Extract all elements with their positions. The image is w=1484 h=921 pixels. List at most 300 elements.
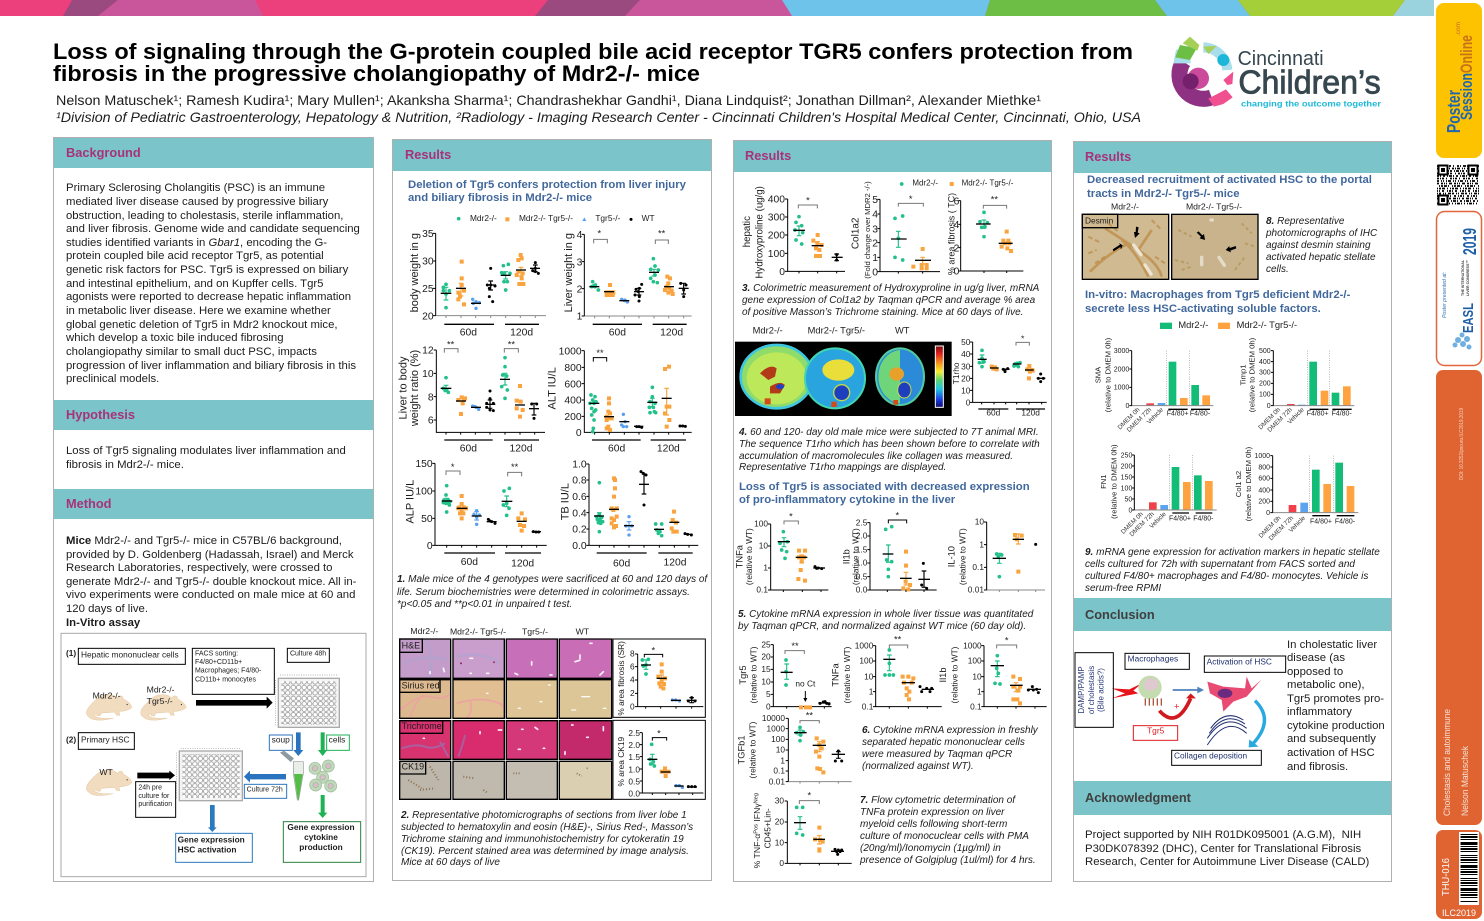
subheading: deletion of Tgr5: and biliary fibrosis in Mdr2-/- mice <box>408 192 592 204</box>
bar chart: Col1a2: F4/80- <box>1335 518 1356 525</box>
sidebar: EASL badge: EASL <box>1460 303 1477 333</box>
chart: liver weight: 3 <box>577 257 583 268</box>
label: gene expression cytokine production: Gene expression <box>287 822 355 832</box>
MRI labels: Mdr2-/- Tgr5/- <box>808 325 865 335</box>
subheading: in-vitro macrophages: secrete less HSC-activating soluble factors. <box>1085 303 1321 315</box>
caption 1: life. Serum biochemistries were determined in colorimetric assays. <box>397 587 690 598</box>
row: Trichrome <box>400 721 612 759</box>
legend <box>459 213 655 223</box>
caption 7: 7. Flow cytometric determination of <box>860 795 1016 806</box>
label: culture 48h: Culture 48h <box>290 651 326 658</box>
chart: Il1b whole liver: 0.5 <box>856 571 868 581</box>
text: background: agonists were reported to decrease hepatic inflammation <box>66 291 351 303</box>
caption 1: *p<0.05 and **p<0.01 in unpaired t test. <box>397 599 572 610</box>
label: macrophages: Macrophages <box>1128 654 1178 664</box>
caption 1: 1. Male mice of the 4 genotypes were sacrificed at 60 and 120 days of <box>397 574 708 585</box>
chart: Col1a2: (Fold change over MDR2 -/-) <box>863 181 872 279</box>
text: conclusion: and subsequently <box>1287 733 1376 745</box>
chart: % area CK19: 1.5 <box>628 752 640 762</box>
chart: liver to body weight ratio: 60d <box>460 444 477 455</box>
label: DAMP/PAMP: DAMP/PAMP <box>1077 666 1086 714</box>
chart: hydroxyproline: * <box>806 195 810 205</box>
chart: Il1b whole liver: 2.5 <box>856 517 868 527</box>
chart: ALP: ** <box>511 462 519 472</box>
MRI labels <box>753 325 910 335</box>
chart: % area fibrosis SR: 2 <box>630 688 635 698</box>
label: soup <box>269 735 292 750</box>
chart: liver to body weight ratio <box>398 339 545 455</box>
chart: body weight: 30 <box>422 257 434 268</box>
text: acknowledgment: Research, Center for Autoimmune Liver Disease (CALD) <box>1085 856 1370 868</box>
chart: hydroxyproline: 400 <box>768 195 785 206</box>
bar chart: FN1: F4/80+ <box>1169 515 1191 522</box>
subheading: deletion of Tgr5: Deletion of Tgr5 confers protection from liver injury <box>408 179 687 191</box>
label: culture 72h <box>244 784 287 798</box>
caption 7: culture of monocuclear cells with PMA <box>860 831 1029 842</box>
caption 7: (20ng/ml)/Ionomycin (1µg/ml) in <box>860 843 1001 854</box>
title: fibrosis in the progressive cholangiopathy of Mdr2-/- mice <box>53 61 700 86</box>
text: background: protein coupled bile acid receptor Tgr5, as potential <box>66 250 324 262</box>
caption 5: 5. Cytokine mRNA expression in whole liver tissue was quantitated <box>738 609 1034 620</box>
bar chart: SMA: 3000 <box>1114 348 1129 355</box>
sidebar: EASL badge <box>1436 212 1482 366</box>
chart: hydroxyproline: Hydroxyproline (ug/g) <box>755 186 766 278</box>
label: DAMP/PAMP <box>1075 653 1113 727</box>
caption 3: gene expression of Col1a2 by Taqman qPCR and average % area <box>742 295 1036 306</box>
caption 4 <box>738 427 1040 473</box>
panel: background, hypothesis, method <box>54 138 374 882</box>
chart: flow cytometry TNFa: * <box>808 791 812 801</box>
chart: % area CK19: 0.0 <box>628 788 640 798</box>
chart: Il1b whole liver: 2.0 <box>856 531 868 541</box>
text: method <box>66 535 357 629</box>
icon: mouse Mdr2 Tgr5: Mdr2-/- <box>147 684 175 694</box>
chart: T1rho: 60d <box>986 408 1001 418</box>
text: conclusion: inflammatory <box>1287 706 1352 718</box>
caption 8: against desmin staining <box>1266 240 1371 251</box>
chart: Tgr5 mononuclear: 20 <box>761 652 771 662</box>
logo: Cincinnati Children's: Cincinnati <box>1238 47 1324 70</box>
chart: TNFa mononuclear: (relative to WT) <box>842 646 852 703</box>
column labels: Tgr5-/- <box>522 627 548 637</box>
text: background: studies identified variants in Gbar1, encoding the G- <box>66 237 327 249</box>
sidebar: orange DOI and session strip: DOI: 10.3252/pso.eu.ILC2019.2019 <box>1459 408 1465 480</box>
chart: liver weight: 60d <box>609 328 626 339</box>
icon: collagen fibres <box>1207 716 1247 745</box>
chart: body weight <box>409 229 546 339</box>
caption 6 <box>862 725 1039 772</box>
chart: Il1b whole liver: Il1b <box>841 549 851 564</box>
text: background: and liver fibrosis. Genome wide and candidate sequencing <box>66 223 360 235</box>
bar chart: Timp1: 200 <box>1259 381 1271 388</box>
label: gene expression HSC activation: HSC activation <box>178 845 236 855</box>
row: H&E <box>400 639 612 678</box>
chart: TNFa mononuclear: 1 <box>869 686 874 696</box>
panel: results 1 <box>392 140 712 880</box>
row: CK19 <box>400 761 612 799</box>
bar chart: Timp1: Timp1 <box>1239 364 1248 385</box>
chart: T1rho: 20 <box>961 373 971 383</box>
chart: flow cytometry TNFa: IFNγ <box>752 803 762 824</box>
chart: TNFa mononuclear: 1000 <box>855 640 874 650</box>
sidebar: orange DOI and session strip <box>1436 370 1482 825</box>
chart: TNFa mononuclear: ** <box>894 635 902 645</box>
chart: liver weight: 4 <box>577 230 583 241</box>
text: conclusion <box>1287 639 1385 773</box>
chart: Il1b mononuclear: 1000 <box>963 640 982 650</box>
chart: hydroxyproline: 100 <box>768 249 785 260</box>
bar chart: SMA: DMEM 72h <box>1126 406 1153 434</box>
chart: % area CK19: % area CK19 <box>616 737 626 786</box>
icon: mouse Mdr2: Mdr2-/- <box>93 690 121 700</box>
chart: liver weight: ** <box>658 229 666 239</box>
sidebar: EASL badge: THE INTERNATIONAL <box>1460 260 1465 296</box>
bar chart: SMA: 1000 <box>1114 385 1129 392</box>
chart: ALT: 120d <box>657 444 680 455</box>
text: method: In-Vitro assay <box>66 617 141 629</box>
chart: Il1b whole liver: 0.0 <box>856 585 868 595</box>
sidebar: EASL badge: 2019 <box>1460 228 1480 255</box>
chart: liver weight <box>563 229 692 339</box>
label: 24h pre culture: culture for <box>138 793 170 800</box>
chart: Tgr5 mononuclear: Tgr5 <box>738 665 748 685</box>
bar chart: Col1a2: 1000 <box>1254 453 1270 460</box>
chart: ALT: 0 <box>576 428 582 439</box>
text: conclusion: cytokine production <box>1287 720 1385 732</box>
legend: Mdr2-/- <box>912 179 938 188</box>
sidebar: poster code and barcode: THU-016 <box>1440 858 1452 896</box>
sidebar: poster code and barcode <box>1436 830 1482 919</box>
label: Tgr5: Tgr5 <box>1147 725 1165 735</box>
icon: QR code <box>1437 164 1479 206</box>
chart: ALP: 100 <box>415 487 433 498</box>
icon: cell cluster <box>309 760 337 792</box>
chart: flow cytometry TNFa: CD45+Lin- <box>763 808 773 848</box>
text: background: preclinical models. <box>66 373 159 385</box>
caption 7: TNFa protein expression on liver <box>860 807 1005 818</box>
arrow: to HSC activation <box>208 805 217 832</box>
bar chart: Timp1: 500 <box>1259 348 1271 355</box>
chart: Il1b mononuclear <box>938 635 1047 711</box>
chart: TB: 60d <box>613 558 631 569</box>
label: gene expression cytokine production: cytokine <box>304 832 338 842</box>
caption 7 <box>859 795 1036 866</box>
text: method: Research Laboratories, respectively, were crossed to <box>66 562 332 574</box>
label: cells: cells <box>329 735 345 745</box>
subheading: decreased recruitment: Decreased recruitment of activated HSC to the portal <box>1087 174 1372 186</box>
chart: Il1b whole liver: * <box>896 511 900 521</box>
chart: TNFa mononuclear: 0.1 <box>862 701 874 711</box>
chart: liver weight: 2 <box>577 284 583 295</box>
caption 8: cells. <box>1266 264 1289 275</box>
authors and affiliations: ¹Division of Pediatric Gastroenterology, Hepatology & Nutrition, ²Radiology - Imaging Research Center - Cincinnati Children's Hospital Medical Center, Cincinnati, Ohio, USA <box>56 109 1141 125</box>
heading: hypothesis: Hypothesis <box>66 407 135 422</box>
chart: flow cytometry TNFa: % TNF-α <box>752 834 762 868</box>
subheading: deletion of Tgr5 <box>408 179 687 204</box>
chart: % area CK19: * <box>657 729 661 739</box>
chart: ALT: 400 <box>564 396 582 407</box>
sidebar: orange DOI and session strip: Nelson Matuschek <box>1460 746 1471 816</box>
chart: Il1b whole liver: 1.5 <box>856 544 868 554</box>
text: background <box>65 182 360 385</box>
label: cells <box>327 735 349 750</box>
text: acknowledgment <box>1085 829 1370 868</box>
chart: liver weight: 120d <box>660 328 683 339</box>
label: hepatic mononuclear cells: Hepatic mononuclear cells <box>81 650 179 660</box>
chart: % area fibrosis SR: 4 <box>630 675 635 685</box>
text: hypothesis: Loss of Tgr5 signaling modulates liver inflammation and <box>66 445 346 457</box>
chart: body weight: body weight in g <box>409 233 421 312</box>
chart: ALP: 50 <box>421 514 433 525</box>
title <box>53 39 1133 86</box>
text: background: global genetic deletion of Tgr5 in Mdr2 knockout mice, <box>66 319 338 331</box>
label: macrophages <box>1125 653 1189 669</box>
bar chart: FN1: 150 <box>1121 474 1132 481</box>
caption 9: cultured F4/80+ macrophages and F4/80- monocytes. Vehicle is <box>1085 571 1368 582</box>
charts: ALP, TB <box>404 459 698 569</box>
column labels: WT <box>576 627 590 637</box>
label: 24h pre culture <box>136 782 176 817</box>
chart: IL-10: 10 <box>975 517 984 527</box>
heading: conclusion <box>1074 598 1391 631</box>
row: Sirius red <box>400 680 612 718</box>
bar chart: Col1a2: 200 <box>1258 499 1270 506</box>
chart: IL-10: IL-10 <box>946 546 956 567</box>
arrow: to culture plate 2 <box>137 771 175 780</box>
chart: Tgr5 mononuclear: 15 <box>761 664 771 674</box>
chart: TNFa mononuclear <box>831 635 942 711</box>
chart: % area fibrosis SR: 8 <box>630 649 635 659</box>
chart: Col1a2: 5 <box>872 195 878 206</box>
heading: results: Results <box>745 148 791 163</box>
label: FACS sorting <box>192 648 274 694</box>
caption 2: subjected to hematoxylin and eosin (H&E)-, Sirius Red-, Masson’s <box>401 822 693 833</box>
chart: Col1a2: 2 <box>872 238 878 249</box>
chart: TNFa whole liver: 100 <box>754 519 768 529</box>
text: method: Mice Mdr2-/- and Tgr5-/- mice in C57BL/6 background, <box>66 535 342 547</box>
diagram: in-vitro assay workflow: (2) <box>66 735 76 745</box>
bar chart: Col1a2: (relative to DMEM 0h) <box>1244 446 1253 521</box>
caption 3: 3. Colorimetric measurement of Hydroxyproline in ug/g liver, mRNA <box>742 283 1040 294</box>
chart: Il1b mononuclear: 100 <box>968 656 982 666</box>
bar chart: Col1a2: F4/80+ <box>1310 518 1332 525</box>
bar chart: Col1a2: DMEM 72h <box>1268 514 1295 542</box>
chart: TNFa whole liver: TNFa <box>735 544 745 568</box>
chart: % area fibrosis SR: * <box>652 645 656 655</box>
text: hypothesis <box>66 445 346 471</box>
chart: ALP: 0 <box>427 541 433 552</box>
heading: background: Background <box>66 145 141 160</box>
heading: background <box>54 138 373 168</box>
chart: TB: 120d <box>664 558 687 569</box>
chart: body weight: 35 <box>422 229 434 240</box>
caption 4: 4. 60 and 120- day old male mice were subjected to 7T animal MRI. <box>738 427 1039 438</box>
chart: Il1b mononuclear: 1 <box>977 686 982 696</box>
label: culture 48h <box>287 648 329 662</box>
bar chart: FN1 <box>1099 444 1217 538</box>
heading: hypothesis <box>54 400 373 430</box>
chart: Il1b mononuclear: 10 <box>972 671 982 681</box>
caption 7: presence of Golgiplug (1ul/ml) for 4 hrs. <box>859 855 1036 866</box>
chart: Col1a2: 4 <box>872 210 878 221</box>
caption 6: (normalized against WT). <box>862 761 974 772</box>
label: collagen deposition: Collagen deposition <box>1174 750 1248 760</box>
heading: results <box>1074 142 1391 173</box>
icon: mouse Mdr2 <box>86 690 132 720</box>
text: method: 120 days of live. <box>66 603 148 615</box>
chart: liver to body weight ratio: 10 <box>422 369 434 380</box>
bar charts: activation markers <box>1093 337 1358 542</box>
column labels: Mdr2-/- <box>410 626 438 636</box>
sidebar: orange DOI and session strip: Cholestasis and autoimmune <box>1442 709 1453 816</box>
heading: acknowledgment: Acknowledgment <box>1085 790 1192 805</box>
chart: Col1a2: * <box>909 194 913 204</box>
bar chart: Col1a2: 800 <box>1258 464 1270 471</box>
bar chart: Col1a2: 600 <box>1258 476 1270 483</box>
caption 6: 6. Cytokine mRNA expression in freshly <box>862 725 1039 736</box>
chart: Tgr5 mononuclear: 5 <box>766 689 771 699</box>
caption 8: 8. Representative <box>1266 216 1345 227</box>
bar chart: Timp1: DMEM 72h <box>1266 406 1294 434</box>
arrow: cells <box>318 732 327 756</box>
lightning bolt <box>1112 683 1142 698</box>
chart: % area fibrosis TC: 6 <box>954 196 960 207</box>
heading: results <box>734 141 1051 172</box>
chart: % area CK19: 2.0 <box>628 740 640 750</box>
bar chart: SMA: 0 <box>1125 403 1129 410</box>
chart: liver weight: 1 <box>577 312 583 323</box>
chart: TGFb1: 100 <box>771 734 785 744</box>
chart: liver to body weight ratio: 120d <box>510 444 533 455</box>
chart: ALT: ** <box>596 348 604 358</box>
arrow: to cytokine production <box>318 795 327 818</box>
chart: TNFa mononuclear: 100 <box>859 656 874 666</box>
subheading: Loss of Tgr5: of pro-inflammatory cytokine in the liver <box>739 494 956 506</box>
chart: hydroxyproline: 300 <box>768 213 785 224</box>
chart: T1rho <box>951 333 1047 418</box>
caption 8: activated hepatic stellate <box>1266 252 1376 263</box>
chart: flow cytometry TNFa: Neg <box>753 793 759 803</box>
MRI images <box>735 342 952 416</box>
chart: TB: 0.8 <box>572 476 587 487</box>
column labels: Mdr2-/- Tgr5-/- <box>450 627 506 637</box>
icon: mouse Mdr2 Tgr5 <box>141 684 186 720</box>
chart: % area fibrosis SR: 6 <box>630 661 635 671</box>
chart: % area fibrosis TC: 4 <box>954 220 960 231</box>
desmin micrographs: Mdr2-/- <box>1111 201 1139 211</box>
text: background: Primary Sclerosing Cholangitis (PSC) is an immune <box>66 182 325 194</box>
title: Loss of signaling through the G-protein coupled bile acid receptor TGR5 confers protection from <box>53 39 1133 64</box>
bar chart: FN1: 250 <box>1121 452 1132 459</box>
chart: ALP: ALP IU/L <box>404 480 416 524</box>
chart: % area fibrosis TC <box>947 193 1023 278</box>
bar chart: FN1: FN1 <box>1099 474 1108 489</box>
subheading: Loss of Tgr5 <box>739 481 1030 506</box>
bar chart: SMA: F4/80+ <box>1167 411 1189 418</box>
caption 6: were measured by Taqman qPCR <box>862 749 1012 760</box>
caption 8 <box>1265 216 1378 275</box>
chart: ALT: 1000 <box>559 346 582 357</box>
chart: ALT: 200 <box>564 412 582 423</box>
chart: liver weight: Liver weight in g <box>563 233 575 312</box>
bar chart: SMA: F4/80- <box>1190 411 1211 418</box>
chart: % area fibrosis TC: 0 <box>954 267 960 278</box>
arrow: Tgr5 positive loop: + <box>1174 701 1179 711</box>
chart: flow cytometry TNFa: 0 <box>779 858 784 868</box>
chart: flow cytometry TNFa: 30 <box>775 796 784 806</box>
label: gene expression HSC activation <box>176 833 252 862</box>
bar chart: FN1: DMEM 72h <box>1128 510 1156 538</box>
chart: flow cytometry TNFa: 10 <box>775 837 784 847</box>
text: background: mediated liver disease caused by progressive biliary <box>66 196 329 208</box>
chart: liver to body weight ratio: 12 <box>422 346 434 357</box>
chart: Tgr5 mononuclear: 10 <box>761 677 771 687</box>
sidebar: PosterSessionOnline badge <box>1436 3 1482 158</box>
icon: mouse Mdr2 Tgr5: Tgr5-/- <box>147 696 173 706</box>
chart: Il1b mononuclear: * <box>1005 635 1009 645</box>
subheading: decreased recruitment <box>1087 174 1372 200</box>
text: hypothesis: fibrosis in Mdr2-/- mice. <box>66 459 184 471</box>
chart: % area CK19: 2.5 <box>628 728 640 738</box>
text: background: progression of liver inflammation and biliary fibrosis in this <box>66 360 356 372</box>
bar chart: Timp1: F4/80+ <box>1307 411 1329 418</box>
row: Trichrome: Trichrome <box>402 721 442 731</box>
chart: TNFa mononuclear: 10 <box>864 671 874 681</box>
icon: tube with supernatant <box>280 751 303 800</box>
caption 5: by Taqman qPCR, and normalized against WT mice (60 day old). <box>738 621 1026 632</box>
chart: liver weight: * <box>598 229 602 239</box>
chart: flow cytometry TNFa <box>752 791 852 868</box>
chart: ALT: 800 <box>564 363 582 374</box>
authors and affiliations <box>56 92 1141 125</box>
chart: TGFb1: 0.1 <box>773 766 785 776</box>
row: H&E: H&E <box>402 640 420 650</box>
bar chart: Timp1: DMEM 0h <box>1257 406 1282 431</box>
chart: TGFb1: 10 <box>776 745 785 755</box>
icon: macrophage <box>1138 676 1162 706</box>
legend: Mdr2-/- Tgr5-/- <box>962 179 1014 188</box>
chart: ALT: 60d <box>608 444 626 455</box>
row: Sirius red: Sirius red <box>402 680 440 690</box>
bar chart: Timp1: Vehicle <box>1286 406 1306 426</box>
diagram: in-vitro assay workflow: (1) <box>66 648 76 658</box>
caption 9: cells cultured for 72h with supernatant from FACS sorted and <box>1085 559 1355 570</box>
caption 5 <box>738 609 1034 632</box>
chart: Il1b whole liver: (relative to WT) <box>851 528 861 585</box>
legend: Mdr2-/- Tgr5-/- <box>519 213 573 223</box>
chart: Col1a2: 0 <box>872 267 878 278</box>
chart: T1rho: 40 <box>961 349 971 359</box>
chart: TNFa whole liver: 1 <box>763 563 768 573</box>
label: 24h pre culture: 24h pre <box>138 784 162 791</box>
arrow: to HSC <box>1173 687 1204 693</box>
chart: ALP: 60d <box>461 557 478 568</box>
chart: body weight: 120d <box>510 328 533 339</box>
chart: Tgr5 mononuclear <box>738 639 832 711</box>
text: background: genetic risk factors for PSC. Tgr5 is expressed on biliary <box>66 264 349 276</box>
chart: TGFb1: 10000 <box>762 713 785 723</box>
label: gene expression cytokine production: production <box>299 842 343 852</box>
bar chart: Timp1 <box>1239 337 1354 434</box>
arrow: culture 72h <box>244 771 286 783</box>
logo: Cincinnati Children's: changing the outcome together <box>1241 99 1382 109</box>
chart: % area fibrosis SR <box>613 639 705 717</box>
chart: Tgr5 mononuclear: 25 <box>761 639 771 649</box>
chart: T1rho: 10 <box>961 385 971 395</box>
heading: conclusion: Conclusion <box>1085 607 1155 622</box>
bar chart: Timp1: 100 <box>1259 392 1271 399</box>
bar chart: SMA: (relative to DMEM 0h) <box>1103 337 1112 412</box>
